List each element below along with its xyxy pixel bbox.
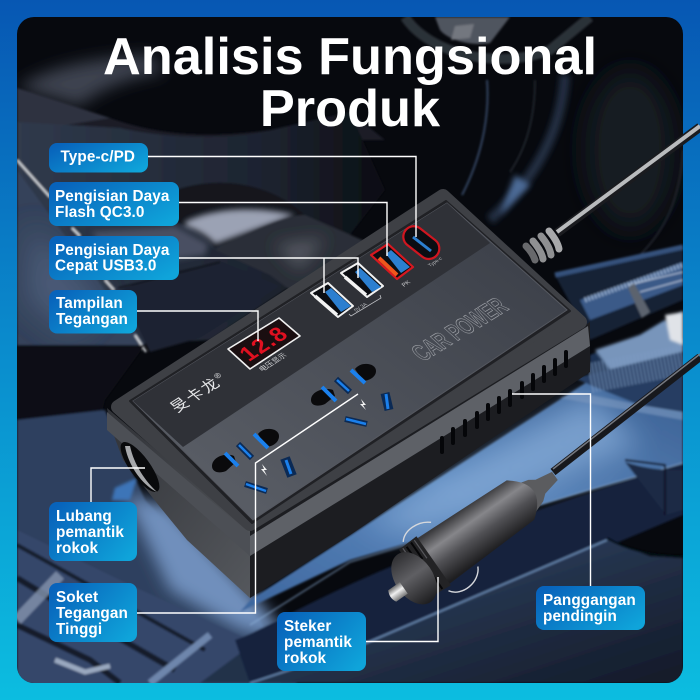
plug springs: [399, 509, 485, 603]
label: lighter plug: [277, 612, 366, 671]
type-c port: [402, 225, 442, 266]
cigarette socket: [120, 442, 160, 492]
slate console middle left: [17, 112, 385, 352]
connector lines: [91, 156, 590, 642]
label: high voltage socket: Tinggi: [56, 621, 102, 638]
label: flash charging: Flash QC3.0: [55, 204, 145, 221]
label: lighter plug: Steker: [284, 618, 331, 635]
title: Produk: [260, 80, 441, 138]
charger device: [107, 196, 590, 598]
title: Analisis Fungsional: [103, 28, 597, 86]
label: cooling grille: pendingin: [543, 608, 617, 625]
left socket: [212, 429, 292, 491]
device right side dark: [250, 322, 590, 598]
device lower panel: [133, 203, 567, 520]
plug ribbed collar: [398, 536, 451, 598]
dashboard right with steering wheel: [405, 17, 683, 255]
label: type-c: [49, 143, 148, 172]
label: fast charging: [49, 236, 179, 280]
device right side band: [250, 326, 590, 556]
dashboard upper left: [17, 55, 385, 140]
label: lighter plug: pemantik: [284, 634, 352, 651]
label: voltage display: Tegangan: [56, 311, 128, 328]
brand logo: ®: [212, 370, 225, 380]
plug body: [416, 468, 550, 585]
voltage display: 12.8: [233, 322, 294, 365]
gear console right: [555, 245, 683, 420]
label: lighter socket: pemantik: [56, 524, 124, 541]
title: [103, 28, 597, 138]
label: flash charging: [49, 182, 179, 226]
power cable upper: [526, 126, 700, 260]
plug head: [382, 544, 446, 613]
voltage display: [228, 318, 300, 373]
plug neck: [513, 463, 566, 515]
label: voltage display: Tampilan: [56, 295, 123, 312]
label: flash charging: Pengisian Daya: [55, 188, 170, 205]
type-c port: Type-c: [427, 256, 444, 268]
qc port: [371, 244, 413, 288]
label: high voltage socket: Soket: [56, 589, 98, 606]
cooling vents: [442, 352, 566, 452]
power cable lower: [553, 354, 700, 472]
device left side: [107, 408, 250, 598]
label: fast charging: Pengisian Daya: [55, 242, 170, 259]
dark area under console: [17, 345, 145, 425]
usb port two: [341, 263, 383, 297]
plug tip: [387, 582, 408, 603]
label: cooling grille: Panggangan: [543, 592, 636, 609]
brand logo: 旻卡龙: [167, 375, 225, 416]
car lighter plug: [365, 443, 579, 627]
device groove: [130, 201, 570, 523]
blue leather lower centre: [235, 380, 683, 683]
label: lighter socket: [49, 502, 137, 561]
label: lighter plug: rokok: [284, 650, 327, 667]
device upper dark strip: [133, 203, 490, 447]
label: cooling grille: [536, 586, 645, 630]
vents lower left: [17, 530, 300, 690]
label: fast charging: Cepat USB3.0: [55, 258, 157, 274]
label: type-c: Type-c/PD: [60, 148, 135, 166]
qc port: PK: [401, 280, 412, 288]
device rim: [118, 196, 580, 524]
label: lighter socket: Lubang: [56, 508, 112, 525]
usb bracket label: 5V 3A: [353, 302, 369, 313]
leather pad highlight: [175, 183, 305, 248]
cable strain relief: [526, 231, 559, 260]
label: high voltage socket: [49, 583, 137, 642]
voltage display: 电压显示: [256, 350, 289, 373]
usb port one: [311, 283, 353, 317]
car power engraving: CAR POWER: [405, 293, 514, 366]
device left band: [107, 412, 204, 508]
label: lighter socket: rokok: [56, 540, 99, 557]
right socket: [311, 364, 389, 424]
usb bracket label: [349, 295, 381, 316]
label: high voltage socket: Tegangan: [56, 605, 128, 622]
label: voltage display: [49, 290, 137, 334]
leather lower left: [17, 410, 300, 690]
